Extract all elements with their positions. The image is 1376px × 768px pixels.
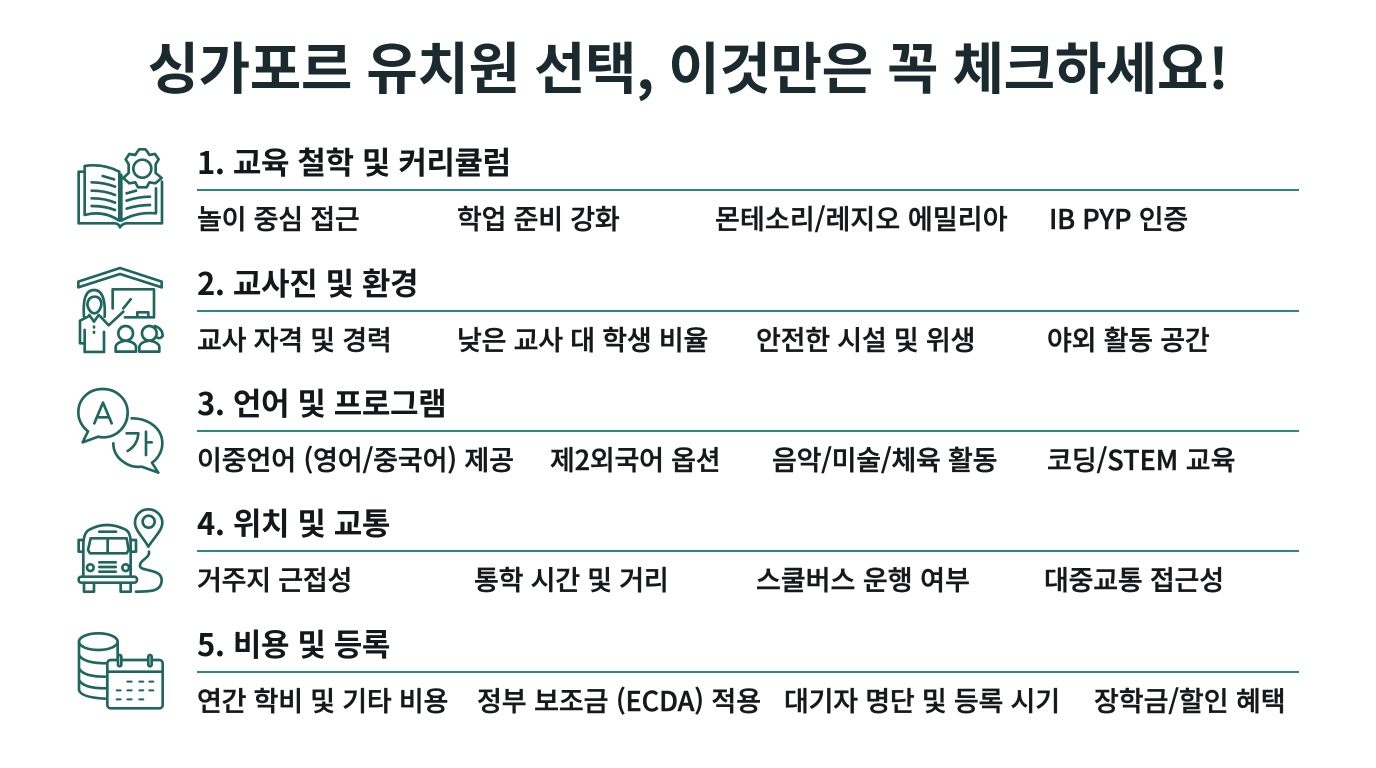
heading: section 1: 1. 교육 철학 및 커리큘럼 (197, 138, 511, 183)
item: transit: 대중교통 접근성 (1044, 559, 1224, 598)
heading: section 4: 4. 위치 및 교통 (197, 499, 390, 544)
item: teacher credentials: 교사 자격 및 경력 (197, 319, 392, 358)
panel: section 5 cost (197, 620, 1299, 719)
title: 싱가포르 유치원 선택, 이것만은 꼭 체크하세요! (148, 25, 1228, 106)
item: low ratio: 낮은 교사 대 학생 비율 (457, 319, 708, 358)
icon: speech bubbles A and 가 (78, 389, 162, 473)
item: annual fees: 연간 학비 및 기타 비용 (197, 680, 448, 719)
item: proximity: 거주지 근접성 (197, 559, 352, 598)
icon: book and gear (79, 149, 162, 227)
item: arts: 음악/미술/체육 활동 (772, 439, 997, 478)
panel: section 4 location (197, 499, 1299, 598)
item: school bus: 스쿨버스 운행 여부 (756, 559, 970, 598)
item: subsidy: 정부 보조금 (ECDA) 적용 (477, 680, 761, 719)
heading: section 3: 3. 언어 및 프로그램 (197, 379, 446, 424)
item: bilingual: 이중언어 (영어/중국어) 제공 (197, 439, 514, 478)
item: IB PYP: IB PYP 인증 (1049, 198, 1188, 237)
icon: school bus and location pin (79, 509, 162, 592)
item: academic readiness: 학업 준비 강화 (457, 198, 620, 237)
item: Montessori/Reggio: 몬테소리/레지오 에밀리아 (715, 198, 1008, 237)
item: commute: 통학 시간 및 거리 (474, 559, 669, 598)
icon: teacher and classroom (78, 268, 163, 352)
item: waitlist: 대기자 명단 및 등록 시기 (784, 680, 1060, 719)
item: second language: 제2외국어 옵션 (550, 439, 720, 478)
item: outdoor space: 야외 활동 공간 (1047, 319, 1210, 358)
panel: section 3 language (197, 379, 1299, 478)
panel: section 2 teachers (197, 259, 1299, 358)
item: safe facilities: 안전한 시설 및 위생 (756, 319, 975, 358)
heading: section 5: 5. 비용 및 등록 (197, 620, 390, 665)
heading: section 2: 2. 교사진 및 환경 (197, 259, 418, 304)
icon: coin stack and calendar (79, 633, 163, 708)
item: play-based: 놀이 중심 접근 (197, 198, 360, 237)
item: scholarship: 장학금/할인 혜택 (1094, 680, 1286, 719)
panel: section 1 curriculum (197, 138, 1299, 237)
item: coding: 코딩/STEM 교육 (1047, 439, 1235, 478)
